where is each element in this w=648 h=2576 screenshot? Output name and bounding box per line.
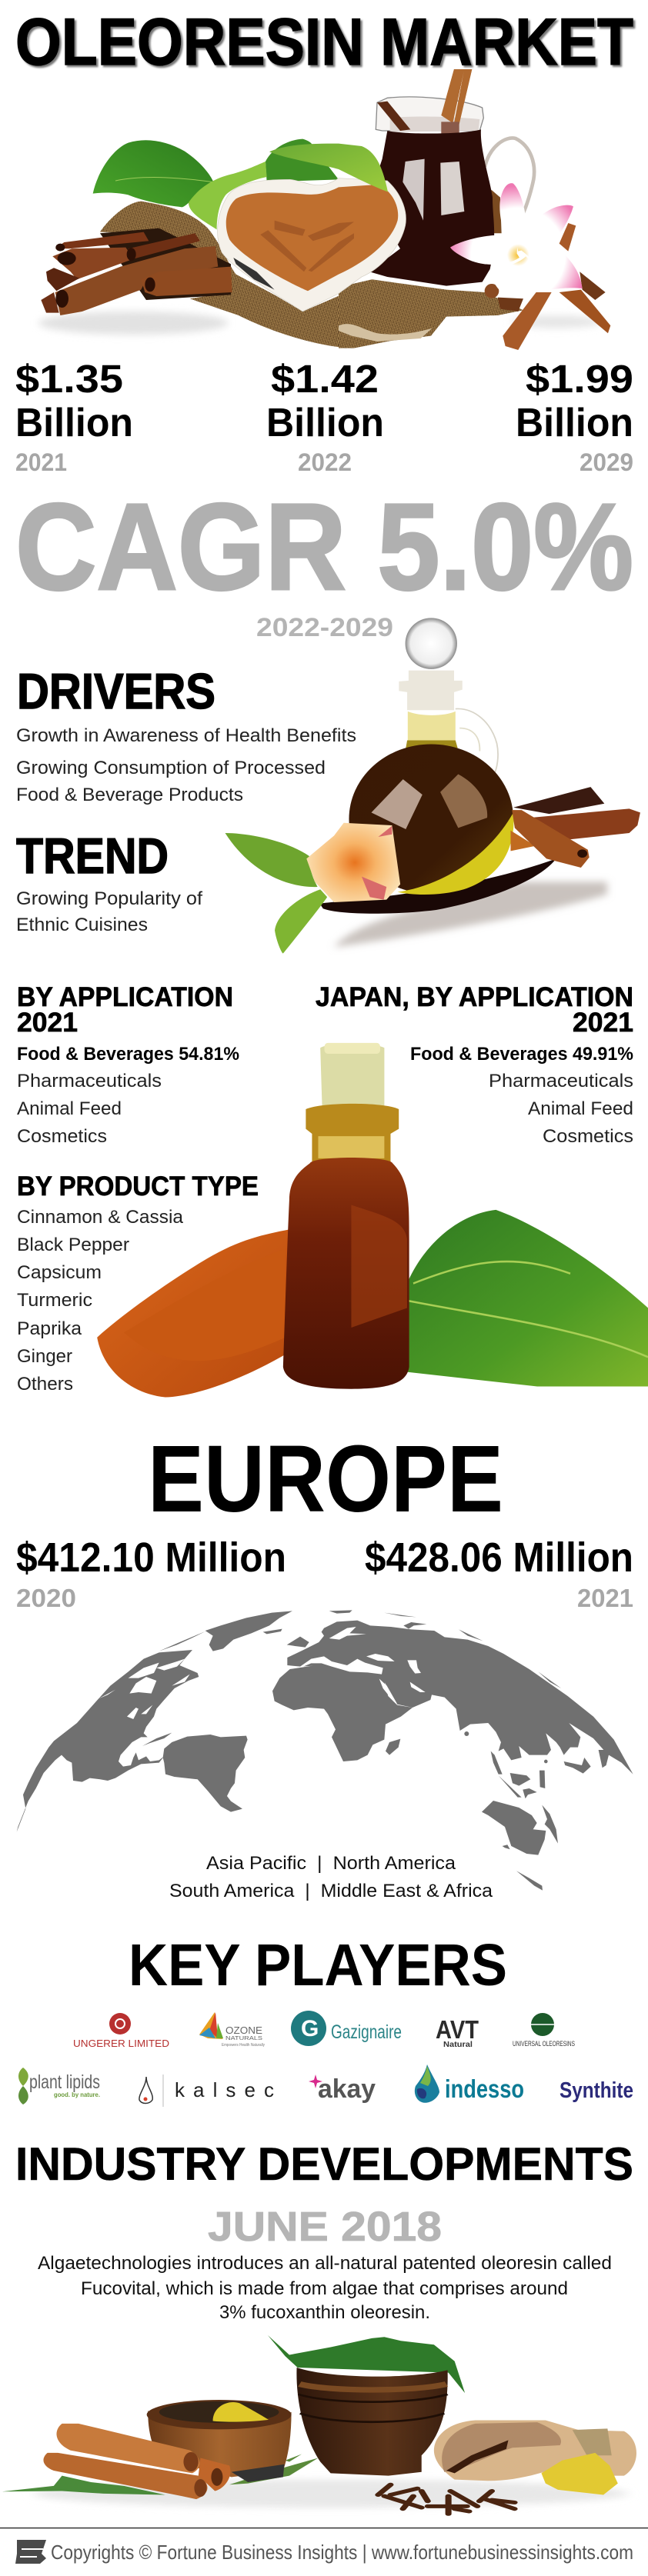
image: oil decanter on plate	[225, 618, 640, 954]
image: spices in wooden bowls	[2, 2335, 636, 2514]
logo: Ungerer Limited: UNGERER LIMITED	[73, 2038, 169, 2049]
trend text	[16, 888, 202, 935]
Japan by application list: Cosmetics	[543, 1126, 633, 1147]
logo: Plant Lipids: plant lipids	[29, 2071, 100, 2093]
by product type list: Turmeric	[17, 1290, 92, 1311]
by product type list: Ginger	[17, 1346, 72, 1367]
Japan by application list: Animal Feed	[528, 1098, 633, 1119]
by application heading: BY APPLICATION	[17, 982, 233, 1012]
logo: Gazignaire: G	[301, 2016, 319, 2041]
logo: Ozone Naturals: Empowers Health Naturally	[222, 2043, 265, 2048]
by application list: Pharmaceuticals	[17, 1071, 162, 1091]
logo: Synthite: Synthite	[559, 2078, 633, 2103]
logo: Indesso: indesso	[445, 2074, 524, 2103]
by application list: Animal Feed	[17, 1098, 122, 1119]
Europe value 2021: 2021	[577, 1584, 633, 1612]
glass jug	[339, 69, 534, 348]
trend text: Ethnic Cuisines	[16, 915, 148, 935]
development description	[38, 2253, 612, 2323]
market values 2022: 2022	[298, 448, 352, 476]
logo: Ozone Naturals: OZONE	[225, 2024, 262, 2036]
Europe value 2021	[365, 1535, 633, 1612]
logo: Ozone Naturals	[199, 2012, 265, 2048]
market values 2021: Billion	[15, 401, 133, 445]
logo: Akay: akay	[318, 2074, 376, 2104]
logo: Kalsec: kalsec	[175, 2078, 274, 2101]
logo: Kalsec	[139, 2074, 274, 2107]
trend heading: TREND	[16, 828, 169, 884]
flower and right cinnamon	[450, 183, 610, 350]
logo: Gazignaire	[291, 2011, 402, 2046]
logo: AVT Natural: Natural	[443, 2041, 473, 2049]
Japan by application heading	[316, 982, 633, 1038]
development date: JUNE 2018	[208, 2204, 442, 2250]
market values 2029	[516, 357, 633, 476]
logo: Ozone Naturals: NATURALS	[225, 2036, 262, 2041]
Europe value 2020: $412.10 Million	[16, 1535, 286, 1581]
by product type list: Others	[17, 1374, 73, 1395]
logo: Indesso	[415, 2064, 524, 2103]
by product type list: Capsicum	[17, 1262, 102, 1283]
image: amber bottle, bark and leaf	[97, 1043, 648, 1398]
logo: Universal Oleoresins: UNIVERSAL OLEORESINS	[513, 2040, 575, 2048]
development description: Fucovital, which is made from algae that comprises around	[81, 2278, 568, 2299]
by product type list: Paprika	[17, 1318, 82, 1339]
trend text: Growing Popularity of	[16, 888, 202, 909]
footer logo	[15, 2540, 46, 2564]
by application list	[17, 1044, 239, 1147]
Japan by application list: Pharmaceuticals	[489, 1071, 633, 1091]
market values 2029: 2029	[580, 448, 633, 476]
market values 2021: 2021	[15, 448, 67, 476]
Europe heading: EUROPE	[148, 1427, 503, 1532]
by product type heading: BY PRODUCT TYPE	[17, 1171, 259, 1201]
other regions list: Asia Pacific | North America	[206, 1853, 456, 1874]
Japan by application heading: 2021	[573, 1008, 633, 1038]
market values 2022: $1.42	[271, 357, 379, 401]
logo: Plant Lipids	[18, 2068, 100, 2104]
market values 2022	[266, 357, 384, 476]
world map	[17, 1610, 633, 1891]
drivers list: Growth in Awareness of Health Benefits	[16, 725, 356, 746]
logo: Gazignaire: Gazignaire	[331, 2021, 402, 2043]
Europe value 2020: 2020	[16, 1584, 76, 1612]
drivers list: Food & Beverage Products	[16, 785, 243, 805]
market values 2029: $1.99	[526, 357, 633, 401]
left leaf	[93, 140, 213, 207]
by application heading	[17, 982, 233, 1038]
CAGR period: 2022-2029	[256, 613, 393, 642]
by product type list: Black Pepper	[17, 1235, 129, 1255]
by product type list: Cinnamon & Cassia	[17, 1207, 184, 1228]
Japan by application list	[410, 1044, 633, 1147]
by application list: Cosmetics	[17, 1126, 107, 1147]
by product type list	[17, 1207, 184, 1395]
logo: Plant Lipids: good. by nature.	[54, 2091, 100, 2098]
market values 2022: Billion	[266, 401, 384, 445]
drivers list	[16, 725, 356, 805]
Japan by application heading: JAPAN, BY APPLICATION	[316, 982, 633, 1012]
market values 2029: Billion	[516, 401, 633, 445]
other regions list: South America | Middle East & Africa	[169, 1881, 493, 1901]
key players heading: KEY PLAYERS	[129, 1932, 507, 1998]
development description: 3% fucoxanthin oleoresin.	[219, 2302, 430, 2323]
Japan by application list: Food & Beverages 49.91%	[410, 1044, 633, 1065]
industry developments heading: INDUSTRY DEVELOPMENTS	[15, 2138, 633, 2190]
by application list: Food & Beverages 54.81%	[17, 1044, 239, 1065]
heart bowl and leaves	[189, 139, 406, 312]
market values 2021: $1.35	[15, 357, 123, 401]
logo: AVT Natural: AVT	[436, 2015, 479, 2044]
logo: Universal Oleoresins	[513, 2013, 575, 2048]
other regions list	[169, 1853, 493, 1901]
Europe value 2020	[16, 1535, 286, 1612]
market values 2021	[15, 357, 133, 476]
by application heading: 2021	[17, 1008, 78, 1038]
drivers list: Growing Consumption of Processed	[16, 758, 326, 778]
logo: Ungerer Limited	[73, 2013, 169, 2049]
development description: Algaetechnologies introduces an all-natural patented oleoresin called	[38, 2253, 612, 2274]
image: cinnamon, bowl and jug	[38, 69, 610, 350]
drivers heading: DRIVERS	[17, 663, 215, 719]
